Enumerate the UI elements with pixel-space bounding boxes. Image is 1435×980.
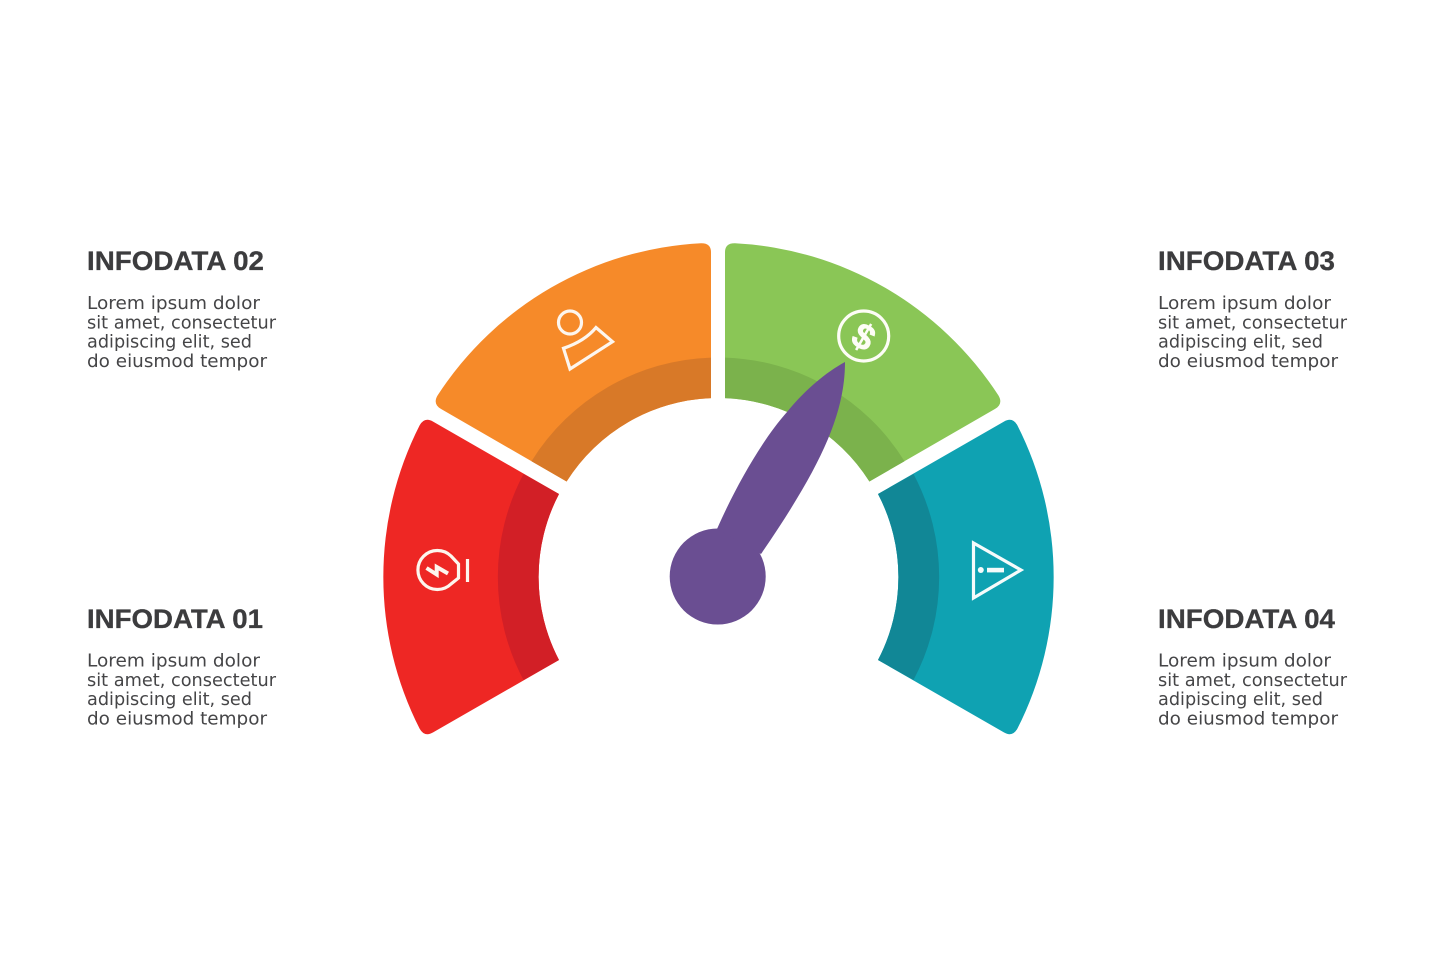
heading: INFODATA 01: INFODATA 01 [87, 604, 263, 634]
body text: INFODATA 03: sit amet, consectetur [1158, 313, 1348, 333]
body text: INFODATA 01: sit amet, consectetur [87, 671, 277, 691]
body text: INFODATA 03: Lorem ipsum dolor [1158, 294, 1332, 314]
body text: INFODATA 04: Lorem ipsum dolor [1158, 652, 1332, 672]
gauge segment: orange [436, 243, 711, 482]
body text: INFODATA 03: do eiusmod tempor [1158, 352, 1339, 372]
body text: INFODATA 02: Lorem ipsum dolor [87, 294, 261, 314]
body text: INFODATA 01 [87, 652, 277, 730]
body text: INFODATA 04: adipiscing elit, sed [1158, 690, 1323, 710]
gauge segment: teal [878, 420, 1054, 734]
heading: INFODATA 02: INFODATA 02 [87, 246, 264, 276]
body text: INFODATA 04 [1158, 652, 1348, 730]
body text: INFODATA 01: adipiscing elit, sed [87, 690, 252, 710]
body text: INFODATA 02 [87, 294, 277, 372]
panel: text block INFODATA 03 [1158, 246, 1348, 372]
icon: dollar coin: $ [845, 314, 883, 359]
body text: INFODATA 01: Lorem ipsum dolor [87, 652, 261, 672]
icon: light bulb with bolt [418, 550, 468, 590]
icon: warning triangle [974, 543, 1021, 598]
heading: INFODATA 03: INFODATA 03 [1158, 246, 1335, 276]
body text: INFODATA 03 [1158, 294, 1348, 372]
gauge segment: red [383, 420, 559, 734]
heading: INFODATA 04: INFODATA 04 [1158, 604, 1335, 634]
body text: INFODATA 02: adipiscing elit, sed [87, 333, 252, 353]
body text: INFODATA 04: do eiusmod tempor [1158, 710, 1339, 730]
body text: INFODATA 02: sit amet, consectetur [87, 313, 277, 333]
panel: text block INFODATA 02 [87, 246, 277, 372]
body text: INFODATA 02: do eiusmod tempor [87, 352, 268, 372]
body text: INFODATA 03: adipiscing elit, sed [1158, 333, 1323, 353]
icon: dollar coin [839, 311, 889, 361]
panel: text block INFODATA 04 [1158, 604, 1348, 730]
gauge needle [670, 362, 845, 624]
gauge segment: green [725, 243, 1000, 482]
body text: INFODATA 04: sit amet, consectetur [1158, 671, 1348, 691]
body text: INFODATA 01: do eiusmod tempor [87, 710, 268, 730]
icon: person [558, 311, 612, 369]
panel: text block INFODATA 01 [87, 604, 277, 730]
